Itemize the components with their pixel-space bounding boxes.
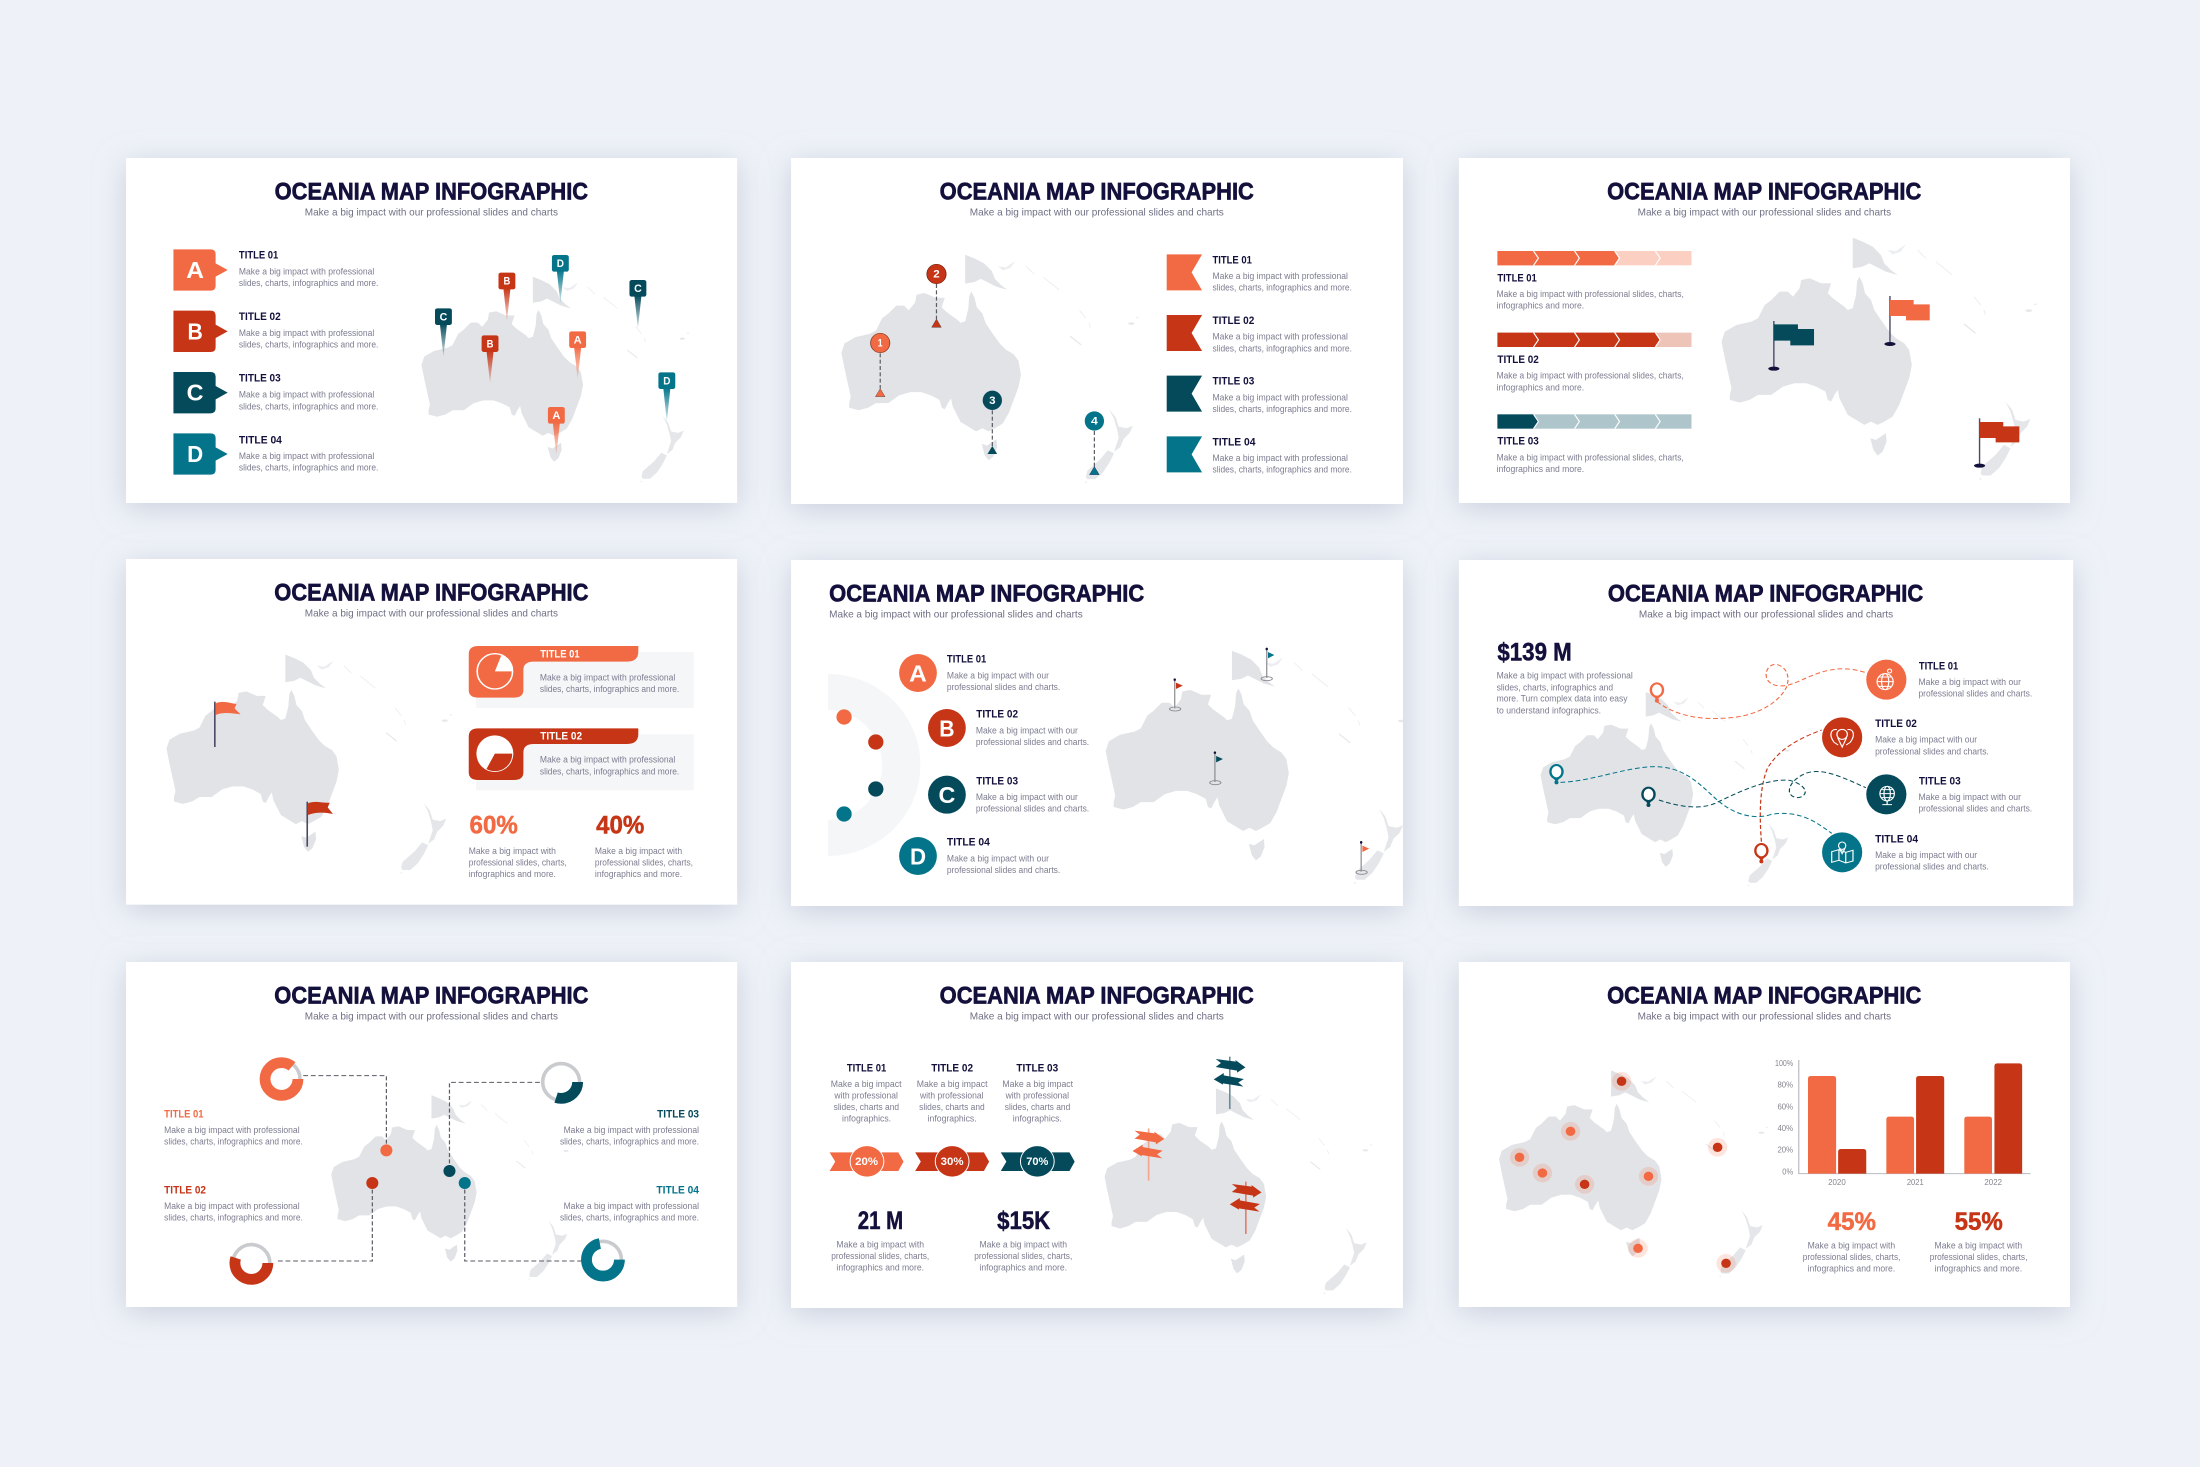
bar chart: 100% xyxy=(1775,1059,1793,1068)
stat 21 M: Make a big impact with xyxy=(836,1240,924,1250)
stat 45%: Make a big impact with xyxy=(1808,1241,1895,1251)
stat 55% xyxy=(1930,1207,2027,1274)
stat 55%: 55% xyxy=(1955,1207,2003,1235)
icon circle: pins xyxy=(1822,717,1862,757)
bar chart: 20% xyxy=(1777,1145,1793,1154)
text: title 01: infographics and more. xyxy=(1497,301,1584,311)
pin D New Zealand xyxy=(658,372,675,422)
badge B: B xyxy=(188,319,203,345)
donut teal xyxy=(584,1241,621,1278)
circle D: D xyxy=(910,844,926,870)
text: title 01: slides, charts, infographics and more. xyxy=(164,1137,303,1147)
chevron bar 2 xyxy=(1497,333,1691,347)
signpost orange xyxy=(1133,1128,1164,1181)
text: title 01 xyxy=(947,653,1060,693)
text: title 02 xyxy=(164,1183,303,1223)
donut red xyxy=(233,1245,270,1281)
panel: slide 2 numbered markers xyxy=(791,158,1403,504)
card: title 02: slides, charts, infographics and more. xyxy=(540,767,679,777)
text: title 02: with professional xyxy=(919,1091,983,1101)
text: title 03: TITLE 03 xyxy=(976,774,1018,787)
text: title 01: TITLE 01 xyxy=(1497,271,1537,284)
flag 02 xyxy=(1167,315,1202,351)
card: title 01: Make a big impact with professional xyxy=(540,673,675,683)
circle C: C xyxy=(938,783,955,808)
stat 45% xyxy=(1803,1207,1900,1274)
text: title 04: TITLE 04 xyxy=(239,433,282,446)
title: OCEANIA MAP INFOGRAPHIC xyxy=(940,178,1254,205)
text: title 01: Make a big impact with our xyxy=(1918,678,2021,688)
bar chart: 2020 xyxy=(1828,1178,1846,1187)
route red xyxy=(1760,730,1822,842)
subtitle: Make a big impact with our professional slides and charts xyxy=(829,609,1083,620)
text: title 03: professional slides and charts. xyxy=(976,804,1089,814)
ribbon 20% xyxy=(830,1146,904,1177)
donut dark teal xyxy=(543,1064,580,1100)
subtitle: Make a big impact with our professional slides and charts xyxy=(1639,609,1894,620)
text: title 03: Make a big impact xyxy=(1002,1080,1073,1090)
signpost red xyxy=(1230,1182,1262,1234)
text: title 03: Make a big impact with professional xyxy=(564,1126,699,1136)
ribbon 30%: 30% xyxy=(941,1155,964,1168)
title: OCEANIA MAP INFOGRAPHIC xyxy=(275,178,588,205)
text: title 01 xyxy=(831,1061,902,1124)
text: title 04 xyxy=(239,433,378,473)
text: title 04: professional slides and charts. xyxy=(947,866,1060,876)
text: title 03: TITLE 03 xyxy=(657,1107,699,1120)
waving flag red xyxy=(307,802,333,847)
card: title 02 xyxy=(469,728,694,790)
text: title 04: TITLE 04 xyxy=(656,1183,699,1196)
flag 04 xyxy=(1167,436,1202,472)
text: title 04 xyxy=(947,836,1060,876)
stat 60% xyxy=(469,811,567,880)
panel: slide 5 lettered circles xyxy=(791,560,1409,906)
text: title 03: slides, charts, infographics and more. xyxy=(239,402,378,412)
text: title 01: professional slides and charts. xyxy=(947,683,1060,693)
text: title 01: TITLE 01 xyxy=(1213,253,1252,266)
stat 60%: Make a big impact with xyxy=(469,847,556,857)
text: title 04: slides, charts, infographics and more. xyxy=(560,1213,699,1223)
badge D: D xyxy=(187,442,203,467)
text: title 02: Make a big impact with professional xyxy=(239,329,374,339)
text: title 01: TITLE 01 xyxy=(164,1107,204,1120)
map xyxy=(1105,1088,1372,1294)
card background xyxy=(1459,962,2070,1307)
badge C: C xyxy=(187,381,204,406)
circle B: B xyxy=(939,716,955,742)
chevron bar 3 xyxy=(1497,414,1691,429)
map dots xyxy=(1510,1072,1736,1273)
text: title 01: Make a big impact with our xyxy=(947,671,1049,681)
stat 60%: infographics and more. xyxy=(469,870,556,880)
text: title 03 xyxy=(239,372,378,412)
text: title 01 xyxy=(164,1107,303,1147)
stat $15K xyxy=(974,1206,1072,1273)
card: title 02: TITLE 02 xyxy=(540,730,582,742)
title: OCEANIA MAP INFOGRAPHIC xyxy=(274,982,588,1009)
pin C east: C xyxy=(634,282,642,295)
text: title 03: Make a big impact with professional xyxy=(239,390,374,400)
text: title 01: Make a big impact xyxy=(831,1080,902,1090)
map xyxy=(1499,1070,1768,1277)
text: title 02: TITLE 02 xyxy=(1875,717,1917,730)
marker 4 xyxy=(1085,411,1104,475)
bar chart: 40% xyxy=(1777,1124,1793,1133)
stat 21 M xyxy=(831,1206,929,1273)
card: title 01 xyxy=(469,646,694,708)
card: title 02: Make a big impact with professional xyxy=(540,755,675,765)
ribbon 70% xyxy=(1001,1146,1075,1177)
subtitle: Make a big impact with our professional slides and charts xyxy=(970,207,1224,218)
marker 3 xyxy=(983,391,1002,454)
panel: slide 8 ribbons and signposts xyxy=(791,962,1403,1308)
text: title 03: with professional xyxy=(1005,1091,1069,1101)
text: title 02: slides, charts and xyxy=(919,1103,985,1113)
stat $139 M: $139 M xyxy=(1497,638,1572,666)
connector red xyxy=(278,1177,378,1261)
stat 55%: infographics and more. xyxy=(1935,1264,2022,1274)
pin B north xyxy=(498,273,515,321)
card background xyxy=(791,560,1403,906)
stat 55%: Make a big impact with xyxy=(1935,1241,2022,1251)
text: title 03: TITLE 03 xyxy=(1213,375,1254,387)
subtitle: Make a big impact with our professional slides and charts xyxy=(305,608,558,619)
subtitle: Make a big impact with our professional slides and charts xyxy=(305,207,558,218)
connector dark teal xyxy=(443,1082,540,1177)
panel: slide 6 routes xyxy=(1459,560,2073,906)
title: OCEANIA MAP INFOGRAPHIC xyxy=(829,580,1144,607)
map xyxy=(331,1095,572,1280)
chevron bar 1 xyxy=(1497,251,1691,265)
route dark teal xyxy=(1659,772,1866,807)
ribbon 20%: 20% xyxy=(855,1155,878,1168)
text: title 02 xyxy=(239,310,378,350)
marker 1 xyxy=(871,333,890,397)
text: title 03 xyxy=(1213,375,1352,415)
pin D north xyxy=(552,255,569,303)
circle C xyxy=(928,776,966,814)
panel: slide 7 donut callouts xyxy=(126,962,737,1307)
text: title 04: slides, charts, infographics and more. xyxy=(239,463,378,473)
text: title 04: TITLE 04 xyxy=(947,836,990,848)
text: title 01: infographics. xyxy=(842,1114,891,1124)
card background xyxy=(791,962,1403,1308)
text: title 02: TITLE 02 xyxy=(164,1183,206,1196)
text: title 02: TITLE 02 xyxy=(239,310,281,323)
text: title 02 xyxy=(1497,353,1684,393)
map xyxy=(1541,692,1794,886)
stat $139 M xyxy=(1497,638,1633,716)
text: title 02: Make a big impact with our xyxy=(976,726,1078,736)
bar chart: 0% xyxy=(1782,1167,1793,1176)
card background xyxy=(1459,560,2073,906)
map xyxy=(1721,238,2037,480)
text: title 04: Make a big impact with professional xyxy=(564,1202,699,1212)
bar chart: 60% xyxy=(1777,1102,1793,1111)
connector orange xyxy=(303,1076,392,1156)
text: title 02: slides, charts, infographics and more. xyxy=(164,1213,303,1223)
bar chart: 80% xyxy=(1777,1080,1793,1089)
text: title 02: TITLE 02 xyxy=(931,1061,973,1074)
text: title 04: Make a big impact with professional xyxy=(239,452,374,462)
stat $139 M: Make a big impact with professional xyxy=(1497,671,1633,681)
text: title 03: slides, charts and xyxy=(1005,1103,1070,1113)
pin A south xyxy=(548,407,565,455)
text: title 02 xyxy=(917,1061,988,1124)
location pin teal xyxy=(1550,765,1563,784)
circle A: A xyxy=(909,661,927,687)
stat $15K: Make a big impact with xyxy=(979,1240,1067,1250)
card background xyxy=(1459,158,2070,503)
stat 60%: professional slides, charts, xyxy=(469,858,567,868)
text: title 04 xyxy=(1213,435,1352,475)
panel: slide 4 pie cards xyxy=(126,559,737,905)
text: title 04: slides, charts, infographics and more. xyxy=(1213,465,1352,475)
bar chart: 2021 xyxy=(1907,1178,1924,1187)
text: title 01: TITLE 01 xyxy=(1919,659,1958,672)
text: title 04: Make a big impact with our xyxy=(1875,851,1978,861)
text: title 02: Make a big impact with professional xyxy=(1213,332,1348,342)
text: title 02: Make a big impact with professional xyxy=(164,1202,300,1212)
text: title 03 xyxy=(976,774,1089,814)
text: title 01: slides, charts and xyxy=(834,1103,899,1113)
badge A xyxy=(173,249,228,291)
text: title 04 xyxy=(560,1183,699,1223)
text: title 03: Make a big impact with professional slides, charts, xyxy=(1497,453,1684,463)
panel: slide 9 bar chart and dots xyxy=(1459,962,2070,1307)
text: title 03: TITLE 03 xyxy=(1497,435,1539,447)
location pin dark teal xyxy=(1642,788,1655,807)
half ring with dots xyxy=(828,674,920,856)
stat 21 M: professional slides, charts, xyxy=(831,1252,929,1262)
stat $15K: infographics and more. xyxy=(979,1263,1067,1273)
title: OCEANIA MAP INFOGRAPHIC xyxy=(1607,982,1921,1009)
text: title 03 xyxy=(560,1107,699,1147)
mini flag red xyxy=(1170,678,1183,711)
map xyxy=(1106,651,1409,884)
text: title 04: Make a big impact with professional xyxy=(1213,454,1348,464)
badge D xyxy=(173,433,228,475)
text: title 02: TITLE 02 xyxy=(1497,353,1539,366)
text: title 03: slides, charts, infographics and more. xyxy=(560,1137,699,1147)
card background xyxy=(126,962,737,1307)
circle B xyxy=(928,709,966,747)
text: title 02: Make a big impact with our xyxy=(1875,735,1978,745)
text: title 01: TITLE 01 xyxy=(947,653,986,665)
stat 45%: professional slides, charts, xyxy=(1803,1253,1900,1263)
text: title 02 xyxy=(1213,314,1352,354)
icon circle: globe on stand xyxy=(1866,774,1906,814)
title: OCEANIA MAP INFOGRAPHIC xyxy=(940,982,1254,1009)
text: title 03 xyxy=(1918,774,2032,814)
text: title 03: TITLE 03 xyxy=(1016,1061,1058,1074)
ribbon 30% xyxy=(915,1146,989,1177)
text: title 02: slides, charts, infographics and more. xyxy=(1213,344,1352,354)
map xyxy=(166,655,452,874)
marker 2 xyxy=(927,264,946,327)
location pin orange xyxy=(1651,683,1663,703)
text: title 01 xyxy=(1213,253,1352,293)
text: title 03: TITLE 03 xyxy=(239,372,281,384)
signpost dark teal xyxy=(1214,1057,1245,1109)
flag 03 xyxy=(1167,376,1202,412)
text: title 03 xyxy=(1002,1061,1073,1124)
panel: slide 3 progress bars and flags xyxy=(1459,158,2070,503)
text: title 02: professional slides and charts. xyxy=(1875,747,1989,757)
card background xyxy=(791,158,1403,504)
mini flag dark teal xyxy=(1210,751,1223,785)
text: title 03: Make a big impact with our xyxy=(976,793,1078,803)
text: title 03: TITLE 03 xyxy=(1919,774,1961,787)
marker 3: 3 xyxy=(989,394,996,407)
marker 4: 4 xyxy=(1091,415,1098,427)
text: title 01: slides, charts, infographics and more. xyxy=(239,279,378,289)
badge B xyxy=(173,311,228,352)
text: title 04 xyxy=(1875,832,1989,872)
card background xyxy=(126,559,737,905)
stat 60%: 60% xyxy=(470,811,518,839)
title: OCEANIA MAP INFOGRAPHIC xyxy=(1607,178,1921,205)
text: title 03 xyxy=(1497,435,1684,475)
flag: red xyxy=(1974,418,2019,468)
text: title 04: TITLE 04 xyxy=(1213,435,1256,448)
pin C west: C xyxy=(440,310,448,323)
map xyxy=(841,255,1139,483)
circle A xyxy=(899,654,937,692)
text: title 01 xyxy=(1497,271,1684,311)
donut orange xyxy=(263,1061,300,1097)
text: title 01 xyxy=(1918,659,2032,699)
text: title 02: TITLE 02 xyxy=(1213,314,1254,327)
map xyxy=(421,277,689,482)
stat 40% xyxy=(595,811,693,880)
icon circle: folded map with pin xyxy=(1822,832,1862,872)
flag: dark teal xyxy=(1768,321,1814,371)
stat $139 M: slides, charts, infographics and xyxy=(1497,683,1613,693)
mini flag orange xyxy=(1356,841,1369,874)
badge A: A xyxy=(186,258,204,283)
pin B north: B xyxy=(504,275,510,287)
card background xyxy=(126,158,737,503)
text: title 01: Make a big impact with professional slides, charts, xyxy=(1497,290,1684,300)
pin A east: A xyxy=(574,333,582,346)
text: title 02: Make a big impact xyxy=(917,1080,988,1090)
stat $15K: $15K xyxy=(997,1206,1050,1234)
waving flag orange xyxy=(215,702,241,747)
pin C west xyxy=(435,308,452,357)
pin B central: B xyxy=(487,337,493,350)
text: title 04: TITLE 04 xyxy=(1875,832,1918,845)
pin C east xyxy=(629,280,646,328)
stat $139 M: to understand infographics. xyxy=(1497,706,1601,716)
stat 55%: professional slides, charts, xyxy=(1930,1253,2027,1263)
panel: slide 1 lettered pins xyxy=(126,158,737,503)
pin A east xyxy=(569,331,586,379)
circle D xyxy=(899,837,937,875)
pin B central xyxy=(482,335,498,383)
text: title 03: infographics and more. xyxy=(1497,465,1584,475)
title: OCEANIA MAP INFOGRAPHIC xyxy=(274,579,588,606)
stat 40%: infographics and more. xyxy=(595,870,682,880)
stat 40%: 40% xyxy=(596,811,644,839)
text: title 02: Make a big impact with professional slides, charts, xyxy=(1497,371,1684,381)
text: title 01: TITLE 01 xyxy=(847,1061,886,1074)
badge C xyxy=(173,372,228,413)
text: title 04: Make a big impact with our xyxy=(947,854,1049,864)
text: title 01: professional slides and charts. xyxy=(1918,689,2032,699)
text: title 01 xyxy=(239,248,378,289)
text: title 01: TITLE 01 xyxy=(239,248,278,261)
text: title 03: professional slides and charts. xyxy=(1918,804,2032,814)
text: title 03: Make a big impact with our xyxy=(1918,793,2021,803)
connector teal xyxy=(459,1177,582,1261)
text: title 01: slides, charts, infographics and more. xyxy=(1213,283,1352,293)
text: title 01: Make a big impact with professional xyxy=(1213,272,1348,282)
marker 2: 2 xyxy=(933,268,940,280)
pin A south: A xyxy=(552,409,561,422)
card: title 01: TITLE 01 xyxy=(540,647,580,660)
text: title 02 xyxy=(1875,717,1989,757)
stat 40%: Make a big impact with xyxy=(595,847,682,857)
subtitle: Make a big impact with our professional slides and charts xyxy=(970,1011,1224,1022)
text: title 01: Make a big impact with professional xyxy=(164,1126,300,1136)
title: OCEANIA MAP INFOGRAPHIC xyxy=(1608,580,1923,607)
marker 1: 1 xyxy=(878,337,883,349)
stat 45%: 45% xyxy=(1828,1207,1876,1235)
pin D north: D xyxy=(557,257,564,270)
stat 21 M: 21 M xyxy=(858,1206,903,1234)
mini flag teal xyxy=(1261,648,1274,681)
text: title 01: with professional xyxy=(834,1091,898,1101)
text: title 01: Make a big impact with professional xyxy=(239,267,374,277)
icon circle: globe with pin xyxy=(1866,660,1906,700)
location pin red xyxy=(1755,844,1767,863)
flag 01 xyxy=(1167,254,1202,290)
flag: orange xyxy=(1884,296,1930,346)
subtitle: Make a big impact with our professional slides and charts xyxy=(1638,1011,1892,1022)
ribbon 70%: 70% xyxy=(1026,1155,1049,1168)
bar chart xyxy=(1775,1059,2031,1187)
text: title 02: TITLE 02 xyxy=(976,708,1018,720)
stat $15K: professional slides, charts, xyxy=(974,1252,1072,1262)
pin D New Zealand: D xyxy=(663,374,671,387)
card: title 01: slides, charts, infographics and more. xyxy=(540,685,679,695)
text: title 04: professional slides and charts. xyxy=(1875,862,1989,872)
subtitle: Make a big impact with our professional slides and charts xyxy=(305,1011,558,1022)
stat 40%: professional slides, charts, xyxy=(595,858,693,868)
route teal xyxy=(1560,767,1832,833)
text: title 02: professional slides and charts. xyxy=(976,738,1089,748)
text: title 02: infographics and more. xyxy=(1497,383,1584,393)
text: title 02: slides, charts, infographics and more. xyxy=(239,340,378,350)
text: title 02 xyxy=(976,708,1089,748)
stat 21 M: infographics and more. xyxy=(836,1263,924,1273)
text: title 03: slides, charts, infographics and more. xyxy=(1213,405,1352,415)
text: title 03: Make a big impact with professional xyxy=(1213,393,1348,403)
stat 45%: infographics and more. xyxy=(1808,1264,1895,1274)
bar chart: 2022 xyxy=(1984,1178,2002,1187)
subtitle: Make a big impact with our professional slides and charts xyxy=(1638,207,1892,218)
text: title 02: infographics. xyxy=(928,1114,977,1124)
stat $139 M: more. Turn complex data into easy xyxy=(1497,694,1628,704)
route orange xyxy=(1657,664,1868,719)
text: title 03: infographics. xyxy=(1013,1114,1062,1124)
